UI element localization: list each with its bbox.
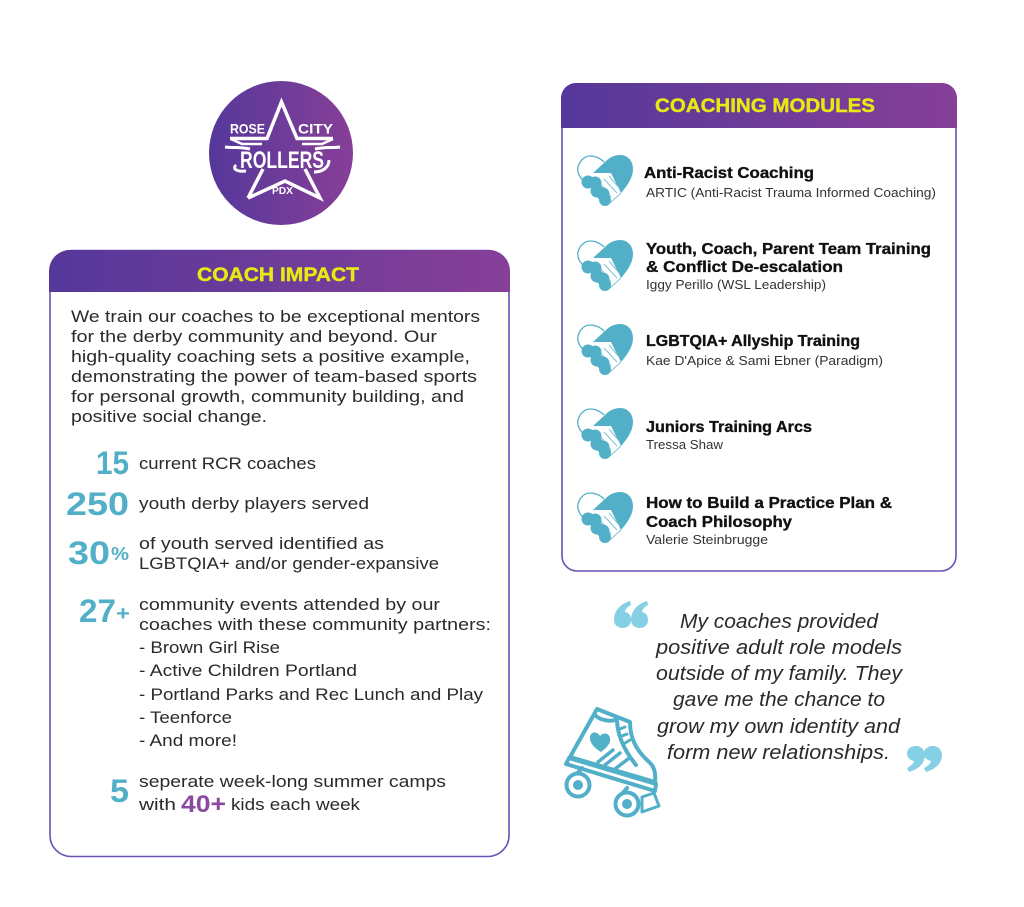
stat: 30 percent: %: [111, 544, 129, 564]
stat: 5 summer camps: with: [138, 796, 176, 814]
intro paragraph: for the derby community and beyond. Our: [71, 328, 438, 346]
icon: roller skate: [566, 709, 659, 816]
quote text: [655, 611, 903, 764]
module: youth coach parent training: & Conflict De-escalation: [646, 259, 843, 276]
stat: 5 summer camps: 5: [110, 773, 129, 809]
heading bar: coach impact: COACH IMPACT: [197, 265, 359, 286]
module: juniors training arcs: Tressa Shaw: [646, 438, 724, 452]
stat: 27+ events: - Teenforce: [139, 709, 232, 727]
logo: Rose City Rollers PDX: ROSE: [230, 120, 265, 136]
stat: 27+ events: +: [116, 603, 130, 625]
quote text: positive adult role models: [655, 637, 902, 659]
logo: Rose City Rollers PDX: ROLLERS: [240, 147, 324, 174]
module: practice plan: Valerie Steinbrugge: [646, 533, 768, 547]
module: juniors training arcs: Juniors Training Arcs: [646, 419, 812, 436]
logo: Rose City Rollers PDX: CITY: [298, 120, 334, 136]
stat: 27+ events: - Portland Parks and Rec Lunch and Play: [139, 686, 484, 704]
stat: 27+ events: coaches with these community partners:: [139, 616, 491, 634]
stat: 15 coaches: [96, 445, 316, 481]
module: allyship training: [578, 324, 883, 375]
logo: Rose City Rollers PDX: [209, 81, 353, 225]
intro paragraph: high-quality coaching sets a positive example,: [71, 348, 470, 366]
intro paragraph: for personal growth, community building, and: [71, 388, 464, 406]
module: practice plan: Coach Philosophy: [646, 514, 792, 531]
panel: coaching modules: [561, 83, 957, 571]
stat: 30 percent: LGBTQIA+ and/or gender-expansive: [139, 555, 439, 573]
quote text: grow my own identity and: [657, 716, 901, 738]
heading bar: coaching modules: COACHING MODULES: [655, 96, 875, 117]
module: youth coach parent training: Youth, Coach, Parent Team Training: [646, 241, 931, 258]
stat: 250 players: 250: [66, 486, 129, 522]
stat: 5 summer camps: kids each week: [231, 796, 361, 814]
stat: 30 percent: of youth served identified as: [139, 535, 384, 553]
stat: 27+ events: [79, 593, 491, 750]
intro paragraph: demonstrating the power of team-based sports: [71, 368, 477, 386]
stat: 15 coaches: 15: [96, 445, 129, 481]
stat: 27+ events: - And more!: [139, 732, 237, 750]
stat: 250 players: youth derby players served: [139, 495, 369, 513]
stat: 5 summer camps: [110, 773, 446, 818]
quote text: My coaches provided: [680, 611, 879, 633]
module: allyship training: Kae D'Apice & Sami Ebner (Paradigm): [646, 354, 883, 368]
quote text: gave me the chance to: [673, 689, 885, 711]
heading bar: coaching modules: [561, 83, 957, 128]
quote text: form new relationships.: [667, 742, 890, 764]
stat: 5 summer camps: 40+: [181, 791, 226, 818]
intro paragraph: [71, 308, 480, 426]
icon: closing quote mark: [907, 746, 942, 772]
stat: 27+ events: - Active Children Portland: [139, 662, 357, 680]
module: anti-racist coaching: [578, 155, 936, 206]
stat: 30 percent: 30: [68, 535, 110, 571]
quote text: outside of my family. They: [656, 663, 903, 685]
stat: 5 summer camps: seperate week-long summer camps: [139, 773, 446, 791]
stat: 30 percent: [68, 535, 439, 573]
module: allyship training: LGBTQIA+ Allyship Training: [646, 333, 860, 350]
module: practice plan: [578, 492, 892, 547]
module: youth coach parent training: [578, 240, 931, 292]
intro paragraph: We train our coaches to be exceptional mentors: [71, 308, 480, 326]
module: practice plan: How to Build a Practice Plan &: [646, 495, 892, 512]
stat: 15 coaches: current RCR coaches: [139, 455, 316, 473]
icon: opening quote mark: [614, 601, 648, 628]
heading bar: coach impact: [49, 250, 510, 292]
module: juniors training arcs: [578, 408, 812, 459]
logo: Rose City Rollers PDX: PDX: [272, 186, 293, 197]
module: anti-racist coaching: Anti-Racist Coaching: [644, 165, 814, 182]
stat: 27+ events: 27: [79, 593, 116, 629]
module: anti-racist coaching: ARTIC (Anti-Racist Trauma Informed Coaching): [646, 186, 936, 200]
stat: 27+ events: community events attended by our: [139, 596, 441, 614]
module: youth coach parent training: Iggy Perillo (WSL Leadership): [646, 278, 826, 292]
stat: 250 players: [66, 486, 369, 522]
panel: coach impact: [49, 250, 510, 856]
stat: 27+ events: - Brown Girl Rise: [139, 639, 280, 657]
intro paragraph: positive social change.: [71, 408, 267, 426]
